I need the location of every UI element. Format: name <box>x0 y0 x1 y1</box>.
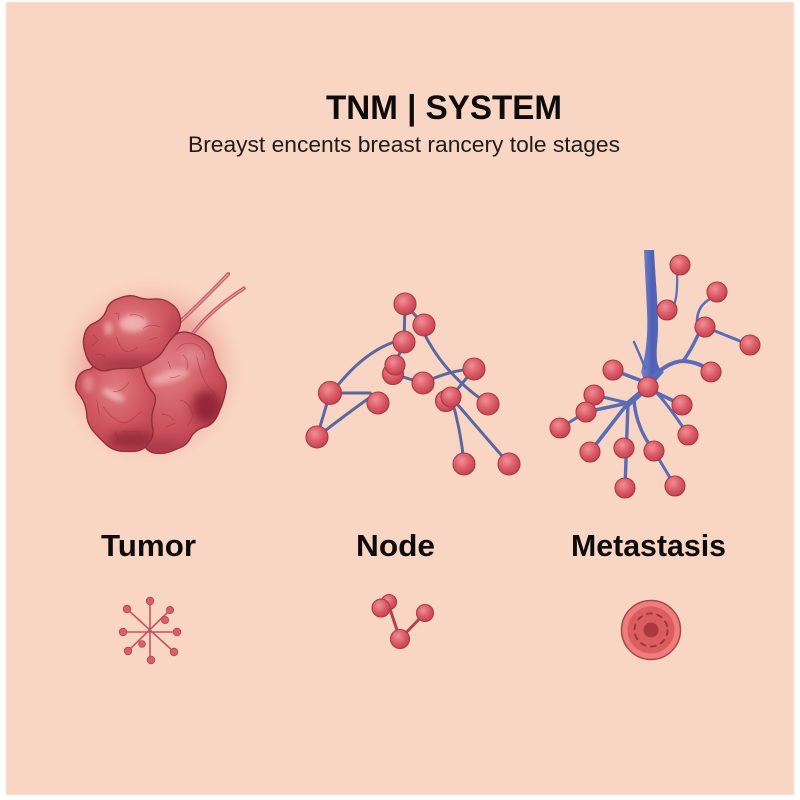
title: TNM | SYSTEM <box>326 89 562 127</box>
node spheres <box>306 293 520 475</box>
icon: metastasis cell <box>622 600 680 660</box>
label: Metastasis: Metastasis <box>571 528 726 563</box>
node network illustration <box>306 293 520 475</box>
tumor vessels <box>178 274 244 335</box>
node links <box>317 304 509 464</box>
lobe: left <box>76 357 155 451</box>
lobe: right <box>141 331 227 454</box>
metastasis spheres <box>550 255 760 498</box>
subtitle: Breayst encents breast rancery tole stages <box>188 132 620 157</box>
label: Node: Node <box>356 528 435 563</box>
vessel trunk <box>641 250 664 390</box>
tumor illustration <box>66 272 246 456</box>
vessel branches <box>560 270 750 488</box>
icon: tumor star <box>119 597 181 664</box>
lobe: top <box>83 296 182 372</box>
tumor glow <box>50 272 250 472</box>
icon: node cluster <box>372 594 434 648</box>
metastasis vessel tree illustration <box>550 250 760 498</box>
label: Tumor: Tumor <box>101 528 196 563</box>
